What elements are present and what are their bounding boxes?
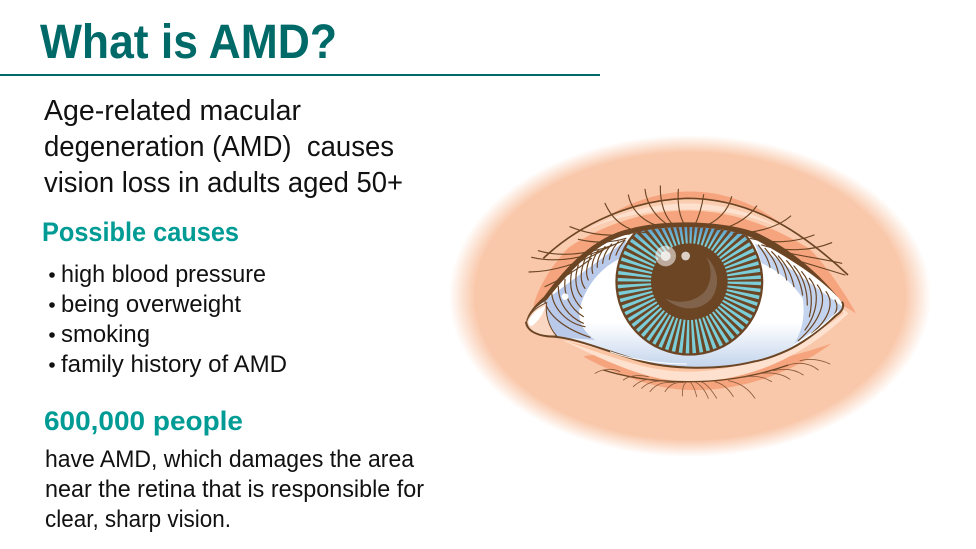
illustration: eye	[449, 135, 931, 457]
iris	[615, 227, 764, 356]
list: causes: family history of AMD	[61, 351, 287, 378]
lower eyelid	[563, 308, 848, 390]
title rule	[0, 74, 600, 76]
upper lid edge	[526, 222, 843, 322]
eye drawing	[526, 186, 856, 398]
description text: clear, sharp vision.	[45, 506, 231, 533]
intro text: Age-related macular	[44, 95, 301, 127]
intro text: degeneration (AMD) causes	[44, 131, 394, 163]
list: causes: being overweight	[61, 291, 241, 318]
skin halo	[449, 135, 931, 457]
sclera	[526, 227, 843, 368]
list: causes	[49, 261, 287, 378]
lower lid edge	[526, 302, 843, 368]
intro text: vision loss in adults aged 50+	[44, 167, 403, 199]
heading: possible causes: Possible causes	[42, 217, 239, 247]
pupil	[653, 245, 725, 317]
list: causes: high blood pressure	[61, 261, 266, 288]
pupil reflection	[665, 257, 717, 308]
description text: have AMD, which damages the area	[45, 446, 415, 473]
description text: near the retina that is responsible for	[45, 476, 424, 503]
list: causes: smoking	[61, 321, 150, 348]
title: What is AMD?	[40, 16, 337, 69]
upper lashes	[529, 186, 845, 287]
lower lashes	[595, 359, 830, 398]
sclera glint	[562, 293, 568, 300]
heading: 600,000 people: 600,000 people	[44, 406, 243, 436]
sclera shading and veins	[543, 240, 845, 345]
eyelid	[533, 192, 856, 313]
iris highlights	[655, 246, 676, 266]
inner corner	[527, 303, 557, 336]
intro text	[44, 95, 403, 199]
description text	[45, 446, 424, 533]
